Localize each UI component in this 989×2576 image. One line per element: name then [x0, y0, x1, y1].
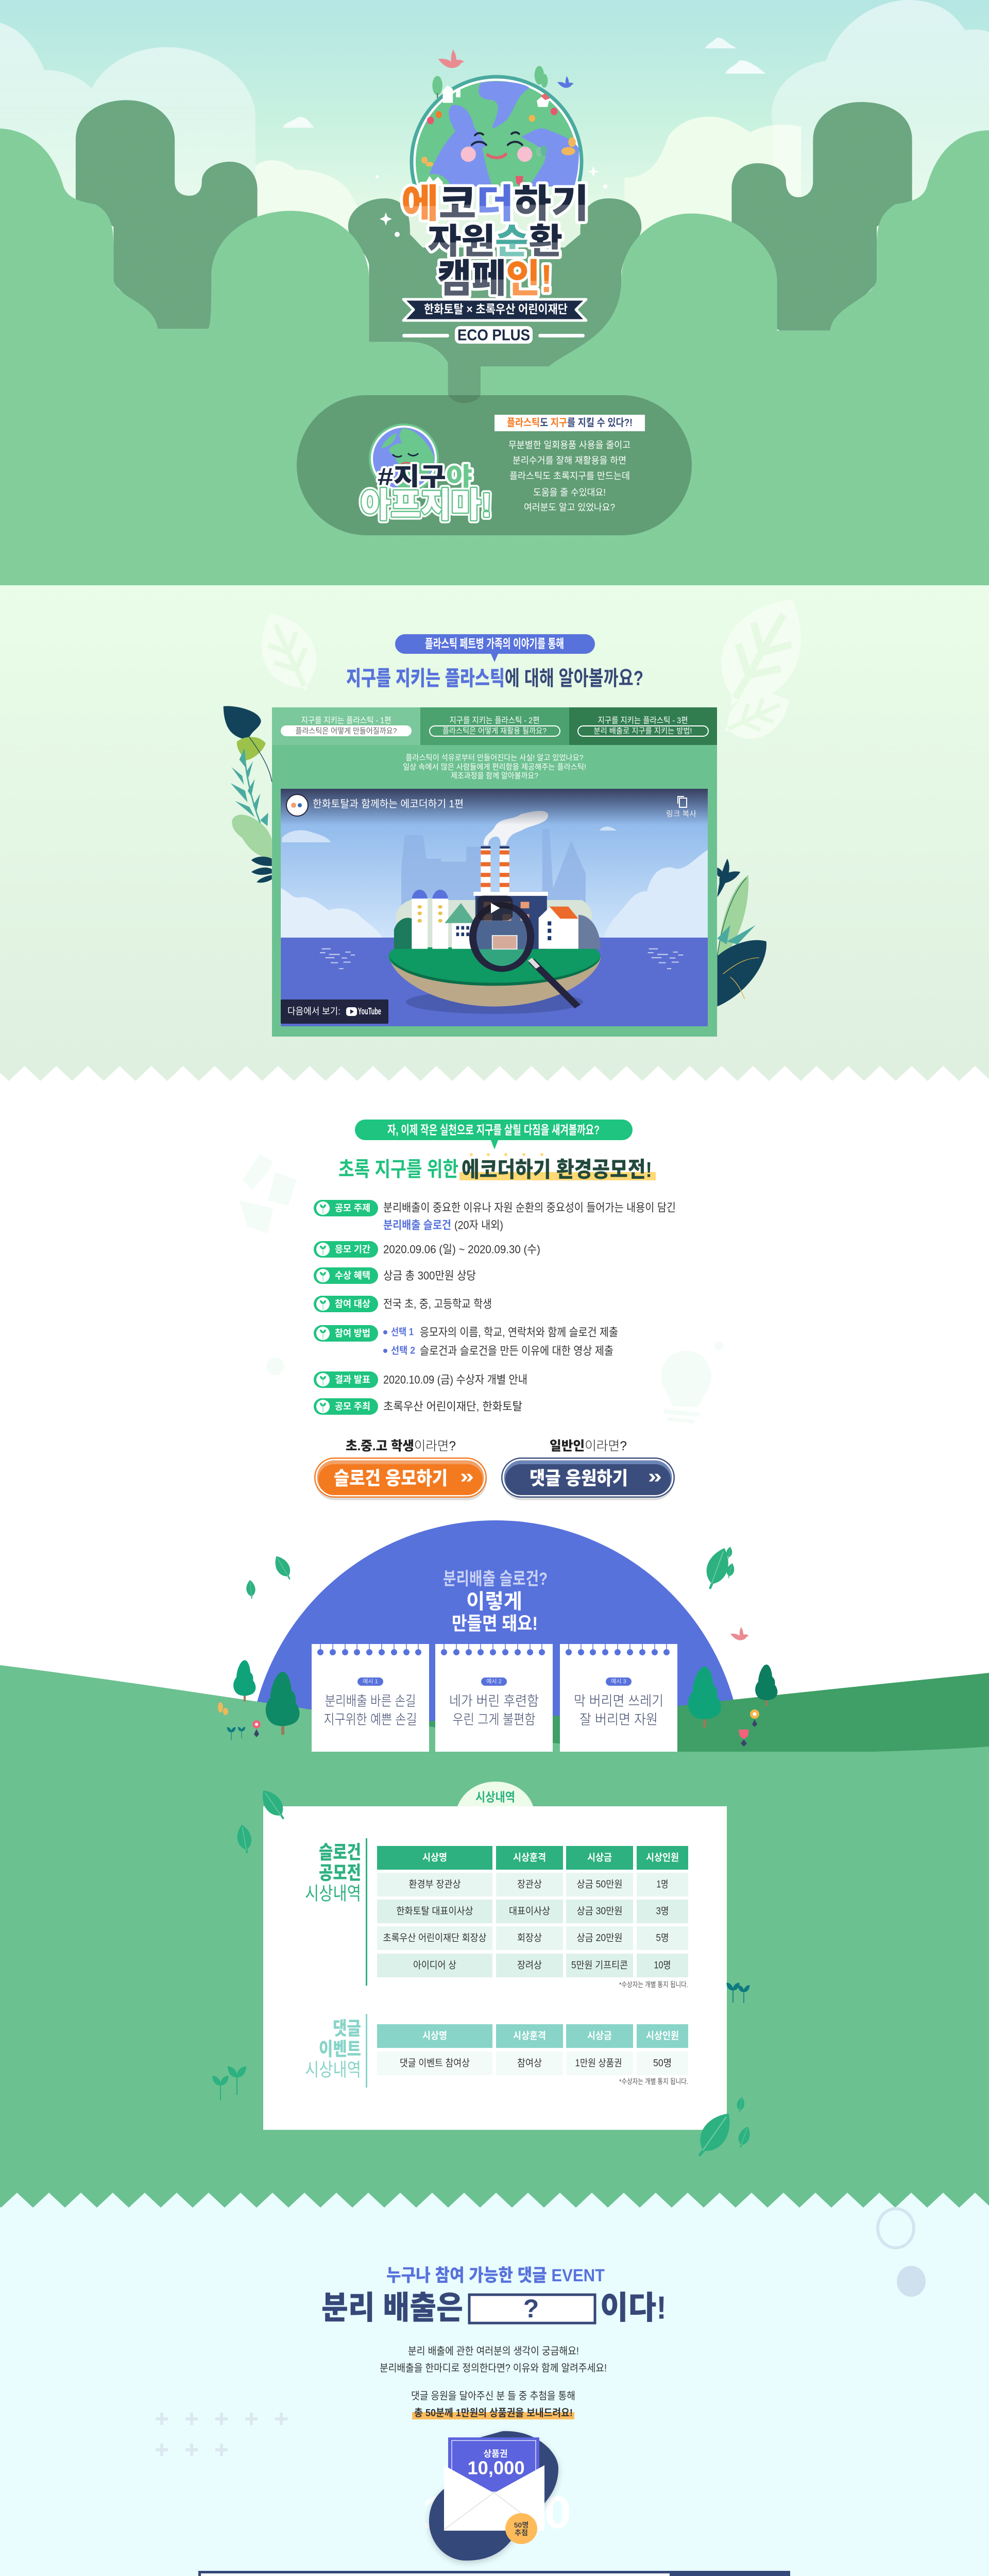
panel description: 제조과정을 함께 알아볼까요? — [451, 772, 538, 780]
faint amount: 10,000 — [422, 2486, 571, 2538]
table note: *수상자는 개별 통지 됩니다. — [619, 2077, 688, 2086]
row: 초록우산 어린이재단 회장상: 5명 — [656, 1932, 669, 1943]
row: 한화토탈 대표이사상: 대표이사상 — [509, 1905, 550, 1917]
header row: 시상금 — [587, 1852, 612, 1863]
example card 3: 예시 3 — [611, 1678, 626, 1685]
channel avatar — [286, 794, 308, 816]
section background — [0, 2208, 989, 2576]
bird: blue — [557, 76, 574, 88]
row: 환경부 장관상: 1명 — [656, 1878, 669, 1890]
tropical leaves: left — [224, 706, 272, 883]
title line 1: 에코더하기 — [401, 182, 589, 226]
example card 1: 예시 1 — [363, 1678, 378, 1685]
comment event heading: 댓글 — [333, 2018, 361, 2039]
comment event table — [377, 2024, 688, 2075]
background white leaves — [247, 581, 824, 751]
tropical leaves: right — [717, 859, 766, 1007]
entry form — [198, 2571, 790, 2576]
tab 3 — [569, 707, 717, 745]
slogan contest heading: 시상내역 — [305, 1883, 361, 1904]
info row: 참여 방법: 선택 2 — [391, 1345, 415, 1356]
green annex — [445, 903, 475, 923]
row: 댓글 이벤트 참여상: 50명 — [653, 2058, 672, 2069]
info row: 참여 대상 — [314, 1296, 492, 1312]
tab 2 — [420, 707, 569, 745]
row: 댓글 이벤트 참여상: 댓글 이벤트 참여상 — [400, 2058, 470, 2069]
row: 환경부 장관상 — [377, 1873, 688, 1896]
hero sky — [0, 0, 989, 237]
speech pill: 플라스틱 페트병 가족의 이야기를 통해 — [425, 637, 564, 651]
small critters and flowers — [218, 1627, 759, 1747]
silos — [412, 899, 448, 949]
info row: 수상 혜택: 상금 총 300만원 상당 — [383, 1269, 476, 1282]
sprouts — [212, 1982, 749, 2100]
tab label: 시상내역 — [475, 1791, 515, 1804]
white label strip: 플라스틱도 지구를 지킬 수 있다?! — [507, 417, 633, 429]
badge: 50명 추첨: 추첨 — [515, 2529, 528, 2537]
example card 2: 네가 버린 후련함 — [449, 1693, 539, 1709]
row: 아이디어 상: 장려상 — [517, 1960, 542, 1971]
event headline: 분리 배출은 — [321, 2291, 463, 2326]
hashtag: 지구야 아프지마: #지구 야 — [378, 463, 472, 492]
island — [389, 958, 601, 1007]
hashtag: 지구야 아프지마 — [361, 463, 492, 524]
prize card leaves — [235, 1786, 753, 2163]
info row: 공모 주최: 공모 주최 — [335, 1401, 370, 1412]
globe decorations — [421, 66, 576, 187]
header row — [377, 1846, 688, 1870]
tab 3: 지구를 지키는 플라스틱 - 3편 — [598, 716, 688, 725]
navy blob — [429, 2431, 558, 2561]
dome heading: 분리배출 슬로건? — [443, 1569, 548, 1589]
info row: 공모 주제 — [314, 1200, 676, 1231]
row: 댓글 이벤트 참여상 — [377, 2052, 688, 2075]
prize card — [263, 1806, 727, 2130]
info row: 응모 기간: 2020.09.06 (일) ~ 2020.09.30 (수) — [383, 1243, 540, 1256]
button: 댓글 응원하기 — [501, 1458, 675, 1500]
video top overlay — [281, 789, 708, 825]
speech pill: 자, 이제 작은 실천으로 지구를 살릴 다짐을 새겨볼까요? — [387, 1123, 600, 1138]
zigzag edge — [0, 1066, 989, 1081]
globe disc — [410, 75, 583, 187]
voucher — [448, 2437, 539, 2494]
video sky — [281, 789, 708, 938]
event eyebrow: 누구나 참여 가능한 댓글 EVENT — [386, 2266, 605, 2285]
intro copy: 무분별한 일회용품 사용을 줄이고 — [508, 440, 630, 450]
event headline: 이다! — [600, 2291, 667, 2326]
contest heading — [338, 1153, 656, 1182]
play button — [477, 895, 513, 921]
slogan contest heading: 슬로건 — [319, 1841, 361, 1863]
event description: 댓글 응원을 달아주신 분 들 중 추첨을 통해 — [411, 2390, 575, 2402]
trees — [233, 1660, 777, 1735]
comment event heading: 이벤트 — [319, 2038, 361, 2060]
faint recycle icon — [240, 1154, 296, 1233]
info row: 결과 발표: 결과 발표 — [335, 1375, 370, 1385]
ribbon: organisers — [403, 299, 586, 320]
hashtag: 지구야 아프지마: 아프지마! — [361, 486, 492, 524]
content input — [201, 2573, 670, 2576]
header row: 시상명 — [422, 2030, 447, 2041]
crying globe — [370, 425, 438, 493]
row: 아이디어 상: 5만원 기프티콘 — [571, 1960, 628, 1971]
info row: 참여 방법: 선택 1 — [391, 1326, 414, 1337]
example card 1: 지구위한 예쁜 손길 — [323, 1712, 417, 1727]
ECO PLUS badge — [402, 326, 585, 344]
event description: 분리 배출에 관한 여러분의 생각이 궁금해요! — [408, 2345, 579, 2357]
faint dots — [266, 1342, 723, 1375]
prize card tab — [457, 1782, 533, 1806]
decorative plus signs — [156, 2413, 287, 2456]
ribbon: organisers: 한화토탈 × 초록우산 어린이재단 — [424, 302, 568, 316]
faint lightbulb icon — [661, 1351, 711, 1423]
section 3: contest details — [240, 1120, 723, 1500]
slogan contest heading: 공모전 — [319, 1862, 361, 1884]
panel description: 일상 속에서 많은 사람들에게 편리함을 제공해주는 플라스틱! — [403, 762, 586, 772]
info row: 공모 주제: 분리배출 슬로건 — [383, 1219, 451, 1231]
dark bush: right — [731, 102, 912, 331]
decorative circles — [878, 2209, 926, 2297]
row: 댓글 이벤트 참여상: 1만원 상품권 — [575, 2058, 622, 2069]
row: 댓글 이벤트 참여상: 참여상 — [517, 2058, 542, 2069]
green background — [0, 1752, 989, 2208]
badge: 50명 추첨: 50명 — [514, 2521, 528, 2529]
row: 초록우산 어린이재단 회장상 — [377, 1926, 688, 1950]
watch on YouTube: 다음에서 보기: — [287, 1006, 340, 1016]
floating leaves — [246, 1545, 736, 1599]
speech pill — [355, 1120, 633, 1149]
header row: 시상인원 — [646, 2030, 679, 2041]
voucher: 상품권 — [483, 2449, 508, 2459]
event description: 분리배출을 한마디로 정의한다면? 이유와 함께 알려주세요! — [380, 2362, 607, 2374]
section 2: video story — [0, 581, 989, 1081]
panel description — [403, 753, 586, 780]
table note: *수상자는 개별 통지 됩니다. — [619, 1980, 688, 1989]
voucher: 10,000 — [468, 2458, 524, 2478]
button: 슬로건 응모하기: » — [460, 1466, 474, 1487]
tab 1: 지구를 지키는 플라스틱 - 1편 — [301, 716, 391, 725]
dome heading — [443, 1569, 548, 1634]
row: 초록우산 어린이재단 회장상: 상금 20만원 — [577, 1932, 622, 1943]
example card 1 — [312, 1644, 429, 1752]
hashtag: 지구야 아프지마: 아프지마! — [361, 486, 492, 524]
row: 아이디어 상 — [377, 1954, 688, 1977]
row: 한화토탈 대표이사상: 상금 30만원 — [577, 1905, 622, 1917]
speech pill — [395, 634, 595, 662]
intro copy — [508, 440, 630, 513]
hero section — [0, 0, 989, 585]
intro copy: 분리수거를 잘해 재활용을 하면 — [513, 455, 626, 466]
section heading: 지구를 지키는 플라스틱에 대해 알아볼까요? — [346, 667, 643, 690]
event description: 총 50분께 1만원의 상품권을 보내드려요! — [414, 2407, 573, 2419]
sky gap behind title — [407, 196, 581, 247]
comment event heading — [305, 2014, 367, 2088]
tab 1 — [272, 707, 420, 745]
contest heading: 에코더하기 환경공모전! — [462, 1157, 652, 1182]
example card 1: 분리배출 바른 손길 — [325, 1693, 416, 1709]
house — [539, 907, 578, 949]
info row: 공모 주제: 분리배출이 중요한 이유나 자원 순환의 중요성이 들어가는 내용이 담긴 — [383, 1201, 676, 1214]
button: 댓글 응원하기: » — [648, 1466, 662, 1487]
info row: 공모 주제: (20자 내외) — [454, 1219, 503, 1231]
sparkles — [376, 166, 607, 237]
sea ripples — [320, 949, 683, 969]
bird: pink — [438, 49, 464, 68]
dark bush: centre — [348, 198, 641, 403]
video title: 한화토탈과 함께하는 에코더하기 1편 — [313, 798, 464, 810]
section 4: slogan examples — [0, 1520, 989, 2014]
info row: 참여 대상: 참여 대상 — [335, 1299, 370, 1309]
contest heading: 초록 지구를 위한 — [338, 1158, 458, 1181]
dark bush: left — [76, 100, 258, 329]
example card 3: 막 버리면 쓰레기 — [574, 1693, 663, 1709]
comment event heading: 시상내역 — [305, 2059, 361, 2080]
info row: 참여 방법: 참여 방법 — [335, 1328, 370, 1338]
info row: 공모 주최 — [314, 1398, 522, 1415]
zigzag edge — [0, 2193, 989, 2208]
button: 슬로건 응모하기 — [314, 1458, 487, 1500]
slogan contest table — [377, 1846, 688, 1977]
title line 3: 캠페인! — [437, 257, 553, 301]
info row: 공모 주제: 공모 주제 — [335, 1203, 370, 1213]
story panel — [272, 707, 717, 1037]
row: 초록우산 어린이재단 회장상: 회장상 — [517, 1932, 542, 1943]
header row: 시상명 — [422, 1852, 447, 1863]
green hills with dark bushes — [0, 100, 989, 585]
section 6: comment event — [0, 2193, 989, 2576]
prompt: students: 초.중.고 학생이라면? — [346, 1439, 456, 1453]
info row: 결과 발표 — [314, 1371, 527, 1388]
copy link icon: 링크 복사 — [666, 810, 696, 818]
info row: 응모 기간 — [314, 1241, 540, 1258]
event headline — [321, 2291, 667, 2326]
header row: 시상금 — [587, 2030, 612, 2041]
prompt: general public: 일반인이라면? — [550, 1439, 627, 1453]
smoke — [484, 811, 548, 845]
chimneys — [481, 846, 509, 892]
badge: 50명 추첨 — [505, 2513, 537, 2544]
info row: 응모 기간: 응모 기간 — [335, 1244, 370, 1255]
white label strip — [494, 415, 645, 431]
video player — [281, 789, 708, 1026]
watch on YouTube — [281, 999, 388, 1024]
video scene — [281, 811, 708, 1026]
info row: 수상 혜택: 수상 혜택 — [335, 1270, 370, 1281]
info row: 수상 혜택 — [314, 1267, 476, 1284]
intro copy: 플라스틱도 초록지구를 만드는데 — [509, 471, 630, 481]
dome heading: 이렇게 — [466, 1590, 522, 1613]
row: 한화토탈 대표이사상: 한화토탈 대표이사상 — [397, 1905, 473, 1917]
background trees — [396, 898, 592, 947]
example card 2 — [435, 1644, 553, 1752]
row: 초록우산 어린이재단 회장상: 초록우산 어린이재단 회장상 — [383, 1932, 486, 1943]
slogan contest heading — [305, 1838, 367, 1986]
ECO PLUS badge: ECO PLUS — [457, 326, 530, 344]
hero clouds — [0, 0, 989, 234]
gift voucher envelope — [422, 2431, 571, 2561]
info row: 결과 발표: 2020.10.09 (금) 수상자 개별 안내 — [383, 1374, 527, 1386]
info row: 공모 주최: 초록우산 어린이재단, 한화토탈 — [383, 1400, 522, 1413]
title line 2: 자원순환 — [428, 222, 562, 261]
globe face — [461, 132, 532, 162]
title: 에코더하기 자원순환 캠페인 — [401, 182, 589, 301]
event description — [380, 2345, 607, 2419]
envelope — [444, 2465, 544, 2531]
row: 환경부 장관상: 장관상 — [517, 1878, 542, 1890]
button: 슬로건 응모하기: 슬로건 응모하기 — [334, 1467, 448, 1489]
row: 한화토탈 대표이사상: 3명 — [656, 1905, 669, 1917]
front hills — [0, 128, 989, 585]
row: 한화토탈 대표이사상 — [377, 1900, 688, 1923]
info row: 참여 대상: 전국 초, 중, 고등학교 학생 — [383, 1297, 492, 1311]
watch on YouTube: YouTube — [358, 1006, 381, 1016]
row: 환경부 장관상: 환경부 장관상 — [409, 1878, 461, 1890]
copy link icon — [666, 796, 696, 818]
event headline: ? — [523, 2294, 539, 2323]
island shadow — [406, 994, 583, 1014]
magnifier — [473, 905, 577, 1007]
header row: 시상인원 — [646, 1852, 679, 1863]
example card 2: 우린 그게 불편함 — [452, 1712, 536, 1727]
example card 2: 예시 2 — [486, 1678, 502, 1685]
tab 1: 플라스틱은 어떻게 만들어질까요? — [296, 726, 397, 736]
dome heading: 만들면 돼요! — [452, 1613, 538, 1634]
tab 3: 분리 배출로 지구를 지키는 방법! — [593, 726, 692, 736]
example card 3 — [560, 1644, 677, 1752]
button: 댓글 응원하기: 댓글 응원하기 — [530, 1467, 628, 1489]
example card 3: 잘 버리면 자원 — [579, 1712, 658, 1727]
blue dome — [248, 1520, 743, 2014]
panel description: 플라스틱이 석유로부터 만들어진다는 사실! 알고 있었나요? — [406, 753, 583, 762]
intro pill panel — [297, 395, 692, 535]
intro copy: 도움을 줄 수있대요! — [533, 487, 606, 498]
hills — [0, 1665, 989, 1762]
row: 아이디어 상: 아이디어 상 — [413, 1960, 456, 1971]
factory — [473, 892, 548, 896]
info row: 참여 방법 — [314, 1325, 618, 1357]
tab 2: 지구를 지키는 플라스틱 - 2편 — [449, 716, 540, 725]
row: 아이디어 상: 10명 — [654, 1960, 671, 1971]
intro copy: 여러분도 알고 있었나요? — [524, 502, 615, 513]
section 5: prize tables — [0, 1752, 989, 2208]
header row — [377, 2024, 688, 2048]
info row: 참여 방법: 응모자의 이름, 학교, 연락처와 함께 슬로건 제출 — [420, 1326, 618, 1338]
globe illustration — [376, 49, 607, 247]
tab 2: 플라스틱은 어떻게 재활용 될까요? — [442, 726, 547, 736]
info row: 참여 방법: 슬로건과 슬로건을 만든 이유에 대한 영상 제출 — [420, 1345, 613, 1357]
header row: 시상훈격 — [513, 1852, 546, 1863]
row: 환경부 장관상: 상금 50만원 — [577, 1878, 622, 1890]
section background — [0, 585, 989, 1081]
header row: 시상훈격 — [513, 2030, 546, 2041]
